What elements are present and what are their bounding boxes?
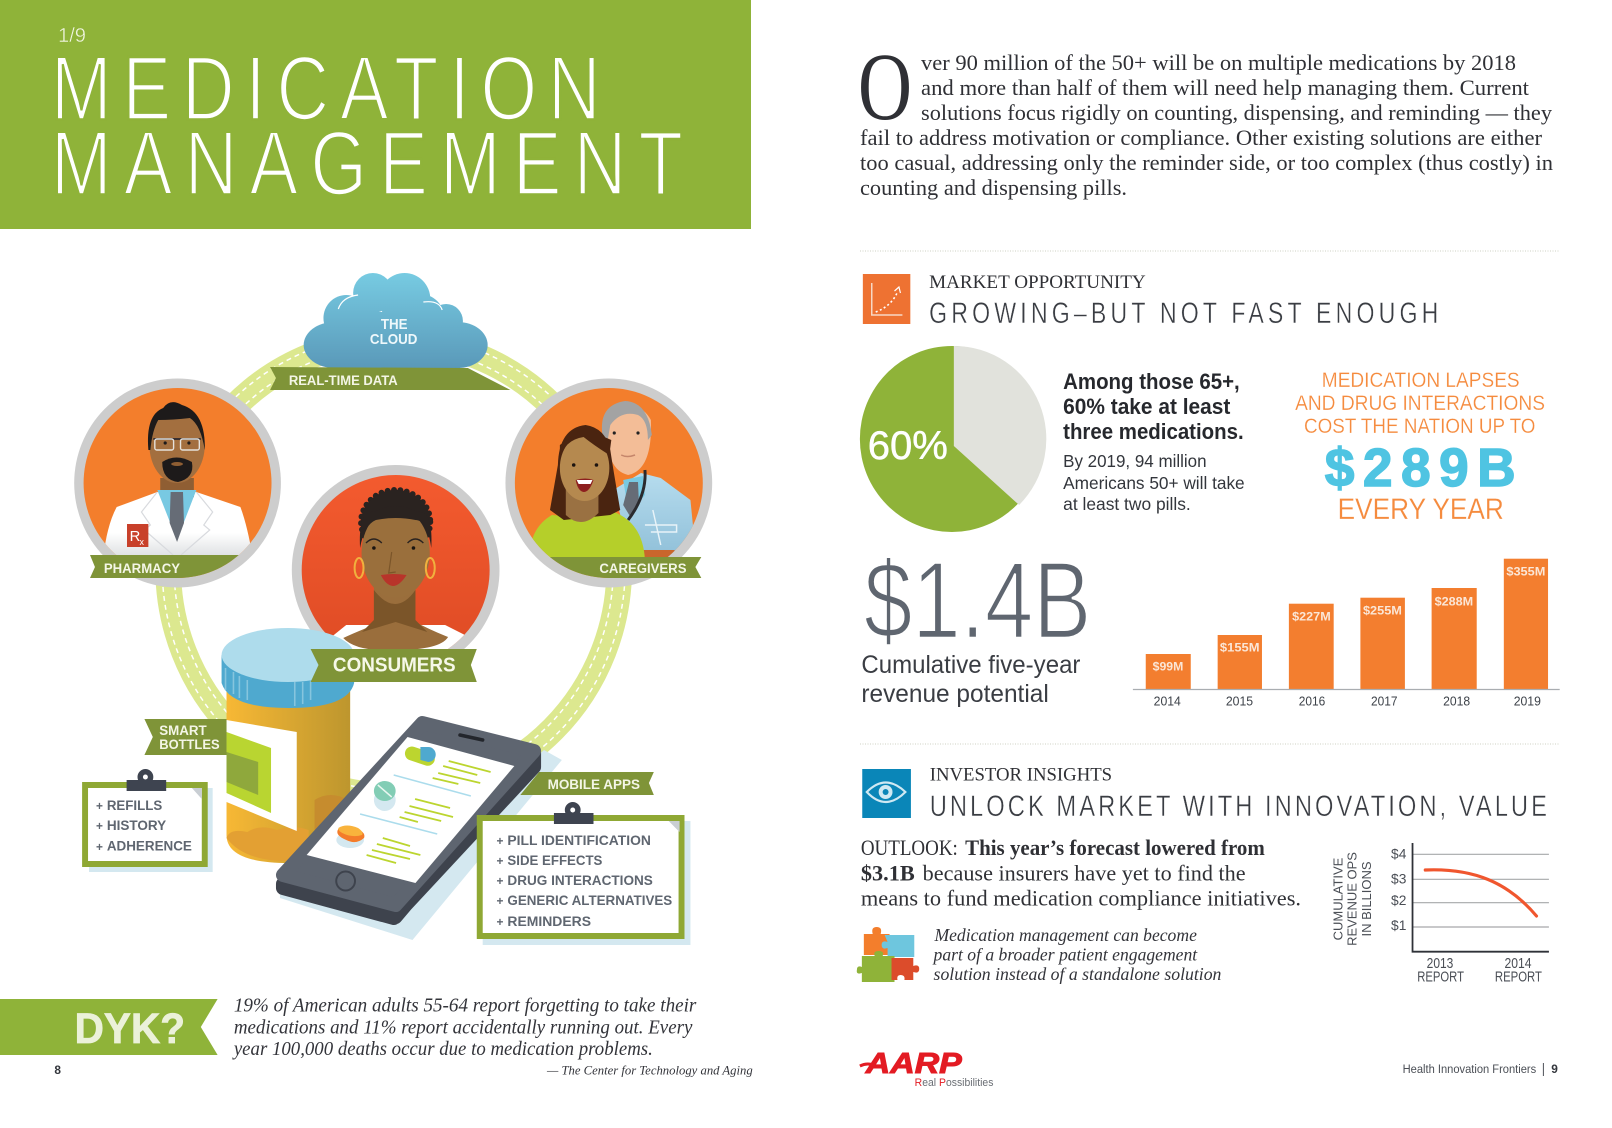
title: MANAGEMENT bbox=[51, 113, 683, 214]
callout: cost of lapses: MEDICATION LAPSES bbox=[1322, 369, 1520, 392]
callout: cost of lapses: AND DRUG INTERACTIONS bbox=[1295, 392, 1545, 415]
italic note bbox=[932, 925, 1221, 984]
stat text: 65+ bbox=[1063, 369, 1245, 514]
axis title bbox=[1331, 852, 1374, 946]
bar chart: revenue by year bbox=[1133, 559, 1560, 709]
axis title: REVENUE OPS bbox=[1345, 852, 1359, 946]
heading: investor insights: UNLOCK MARKET WITH INNOVATION, VALUE bbox=[930, 789, 1547, 823]
did you know banner: DYK? bbox=[75, 1005, 185, 1053]
pharmacy portrait: PHARMACY bbox=[104, 560, 181, 576]
ribbon segment bbox=[134, 555, 239, 578]
diagram: connected care ring bbox=[162, 334, 625, 802]
logo: aarp bbox=[860, 1048, 994, 1089]
doctor bbox=[616, 473, 693, 557]
bottle features list: REFILLS bbox=[107, 797, 162, 813]
screen: round pill bbox=[374, 781, 396, 811]
did you know text: 19% of American adults 55-64 report forgetting to take their bbox=[234, 995, 697, 1017]
app features list: PILL IDENTIFICATION bbox=[507, 832, 651, 848]
stat text: 65+: Among those 65+, bbox=[1063, 369, 1240, 394]
bar chart: revenue by year: 2017 bbox=[1371, 694, 1397, 709]
intro paragraph: counting and dispensing pills. bbox=[860, 175, 1127, 200]
rx badge: R bbox=[130, 529, 141, 545]
bottle features list bbox=[96, 797, 192, 854]
intro paragraph: fail to address motivation or compliance. Other existing solutions are either bbox=[860, 125, 1543, 150]
ribbon: smart bottles: SMART bbox=[159, 722, 207, 738]
pie chart: 60% bbox=[868, 424, 948, 468]
heading: market opportunity: MARKET OPPORTUNITY bbox=[929, 272, 1146, 293]
line chart: forecast: $4 bbox=[1391, 846, 1407, 862]
app features list: DRUG INTERACTIONS bbox=[507, 872, 653, 888]
outlook text bbox=[861, 836, 1301, 910]
bar chart: revenue by year: $288M bbox=[1435, 595, 1473, 609]
did you know text bbox=[232, 995, 697, 1060]
icon: eye bbox=[862, 769, 911, 818]
cloud bbox=[304, 273, 488, 368]
title banner bbox=[0, 0, 751, 229]
app features list: GENERIC ALTERNATIVES bbox=[507, 892, 672, 908]
app features list: + bbox=[497, 854, 504, 868]
callout: cost of lapses: EVERY YEAR bbox=[1338, 493, 1504, 526]
callout: cost of lapses bbox=[1295, 369, 1545, 526]
italic note: Medication management can become bbox=[933, 925, 1197, 945]
title: MEDICATION bbox=[51, 38, 601, 139]
did you know text: medications and 11% report accidentally running out. Every bbox=[234, 1016, 693, 1038]
icon: puzzle pieces bbox=[857, 927, 919, 982]
intro paragraph: ver 90 million of the 50+ will be on multiple medications by 2018 bbox=[921, 50, 1516, 75]
footer: 9 bbox=[1551, 1062, 1558, 1076]
did you know banner bbox=[0, 999, 218, 1055]
footer: Health Innovation Frontiers bbox=[1403, 1062, 1536, 1076]
line chart: forecast bbox=[1331, 843, 1549, 986]
clip bbox=[554, 802, 593, 824]
mobile apps clipboard bbox=[480, 802, 690, 945]
title bbox=[51, 38, 683, 214]
woman bbox=[529, 510, 645, 560]
big number caption bbox=[861, 651, 1080, 708]
ribbon: mobile apps bbox=[520, 772, 654, 795]
app features list: + bbox=[497, 834, 504, 848]
bar chart: revenue by year: $355M bbox=[1506, 565, 1545, 579]
heading: market opportunity: GROWING–BUT NOT FAST ENOUGH bbox=[929, 296, 1438, 330]
caregivers portrait: CAREGIVERS bbox=[599, 560, 686, 576]
big number caption: revenue potential bbox=[861, 680, 1049, 708]
bottle features list: + bbox=[96, 799, 103, 813]
bottle cap bbox=[222, 628, 354, 708]
callout: cost of lapses: $289B bbox=[1325, 438, 1516, 498]
cloud label: CLOUD bbox=[370, 332, 418, 348]
outlook text: because insurers have yet to find the bbox=[923, 862, 1246, 886]
axis title: IN BILLIONS bbox=[1359, 861, 1374, 937]
bar chart: revenue by year: 2019 bbox=[1514, 694, 1541, 709]
ribbon: mobile apps: MOBILE APPS bbox=[548, 776, 640, 792]
line chart: forecast: $3 bbox=[1391, 870, 1407, 886]
bar chart: revenue by year: 2016 bbox=[1299, 694, 1325, 709]
stat text: 65+: 60% take at least bbox=[1063, 394, 1231, 419]
heading: investor insights bbox=[930, 765, 1547, 823]
ribbon: real-time data: REAL-TIME DATA bbox=[289, 372, 398, 388]
bottle features list: ADHERENCE bbox=[107, 838, 192, 854]
bar chart: revenue by year: $255M bbox=[1363, 604, 1402, 618]
stat text: 65+: By 2019, 94 million bbox=[1063, 451, 1207, 471]
bottle features list: + bbox=[96, 819, 103, 833]
stat text: 65+: three medications. bbox=[1063, 419, 1244, 444]
ribbon: real-time data bbox=[270, 367, 510, 390]
app features list bbox=[497, 832, 672, 929]
page fraction: 1/9 bbox=[58, 25, 86, 47]
bottle features list: HISTORY bbox=[107, 817, 167, 833]
pie chart bbox=[860, 346, 1046, 532]
italic note: part of a broader patient engagement bbox=[932, 945, 1198, 965]
ribbon: consumers bbox=[311, 649, 477, 682]
bar chart: revenue by year: 2015 bbox=[1226, 694, 1253, 709]
line chart: forecast: $1 bbox=[1391, 917, 1407, 933]
app features list: + bbox=[497, 874, 504, 888]
heading: market opportunity bbox=[929, 272, 1438, 330]
app features list: REMINDERS bbox=[507, 913, 591, 929]
did you know text: year 100,000 deaths occur due to medication problems. bbox=[232, 1038, 653, 1060]
screen bbox=[307, 737, 514, 883]
rx badge: x bbox=[139, 537, 144, 547]
line chart: forecast: 2014 bbox=[1505, 956, 1532, 972]
bar chart: revenue by year: $99M bbox=[1153, 660, 1183, 674]
ribbon: smart bottles: BOTTLES bbox=[159, 736, 220, 752]
right page: market data and insights bbox=[857, 272, 1560, 1089]
pill bottle bbox=[222, 628, 354, 863]
caregivers portrait bbox=[504, 378, 712, 588]
bar chart: revenue by year: 2018 bbox=[1443, 694, 1470, 709]
screen: capsule bbox=[403, 745, 437, 768]
clip bbox=[127, 769, 166, 791]
line chart: forecast: $2 bbox=[1391, 892, 1407, 908]
intro paragraph: too casual, addressing only the reminder side, or too complex (thus costly) in bbox=[860, 150, 1553, 175]
heading: investor insights: INVESTOR INSIGHTS bbox=[930, 765, 1112, 786]
pharmacy portrait bbox=[74, 378, 281, 588]
icon: growth chart bbox=[863, 274, 910, 324]
line chart: forecast: REPORT bbox=[1417, 970, 1464, 986]
line chart: forecast: 2013 bbox=[1427, 956, 1453, 972]
drop cap: O bbox=[858, 33, 912, 140]
smart bottles clipboard bbox=[85, 769, 213, 872]
intro paragraph bbox=[858, 33, 1553, 200]
cloud label bbox=[370, 317, 418, 348]
smartphone bbox=[280, 723, 562, 940]
italic note: solution instead of a standalone solution bbox=[934, 964, 1221, 984]
callout: cost of lapses: COST THE NATION UP TO bbox=[1304, 415, 1535, 438]
bar chart: revenue by year: $155M bbox=[1220, 641, 1260, 655]
pharmacist coat bbox=[103, 492, 253, 560]
app features list: + bbox=[497, 915, 504, 929]
outlook text: OUTLOOK: bbox=[861, 836, 958, 860]
big number: $1.4B bbox=[864, 539, 1091, 662]
consumers portrait bbox=[292, 465, 500, 649]
screen: orange pill bbox=[336, 826, 364, 848]
app features list: SIDE EFFECTS bbox=[507, 852, 602, 868]
ribbon: consumers: CONSUMERS bbox=[333, 655, 456, 677]
logo: aarp: AARP bbox=[865, 1048, 963, 1080]
rx badge bbox=[127, 524, 148, 547]
outlook text: means to fund medication compliance initiatives. bbox=[861, 886, 1301, 910]
stat text: 65+: Americans 50+ will take bbox=[1063, 473, 1245, 493]
page number: 8 bbox=[54, 1063, 61, 1077]
intro paragraph: solutions focus rigidly on counting, dispensing, and reminding — they bbox=[921, 100, 1552, 125]
bar chart: revenue by year: $227M bbox=[1292, 610, 1331, 624]
big number caption: Cumulative five-year bbox=[861, 651, 1080, 679]
bottle features list: + bbox=[96, 840, 103, 854]
intro paragraph: and more than half of them will need help managing them. Current bbox=[921, 75, 1529, 100]
outlook text: $3.1B bbox=[861, 862, 915, 886]
outlook text: This year’s forecast lowered from bbox=[965, 836, 1265, 860]
source: — The Center for Technology and Aging bbox=[546, 1062, 753, 1077]
left page: care diagram and did-you-know bbox=[0, 273, 753, 1077]
app features list: + bbox=[497, 894, 504, 908]
axis title: CUMULATIVE bbox=[1331, 857, 1346, 940]
head bbox=[150, 418, 205, 483]
line chart: forecast: REPORT bbox=[1495, 970, 1542, 986]
logo: aarp: Real Possibilities bbox=[915, 1077, 994, 1089]
bar chart: revenue by year: 2014 bbox=[1154, 694, 1181, 709]
stat text: 65+: at least two pills. bbox=[1063, 494, 1191, 514]
ribbon: smart bottles bbox=[144, 719, 227, 755]
cloud label: THE bbox=[381, 317, 408, 333]
